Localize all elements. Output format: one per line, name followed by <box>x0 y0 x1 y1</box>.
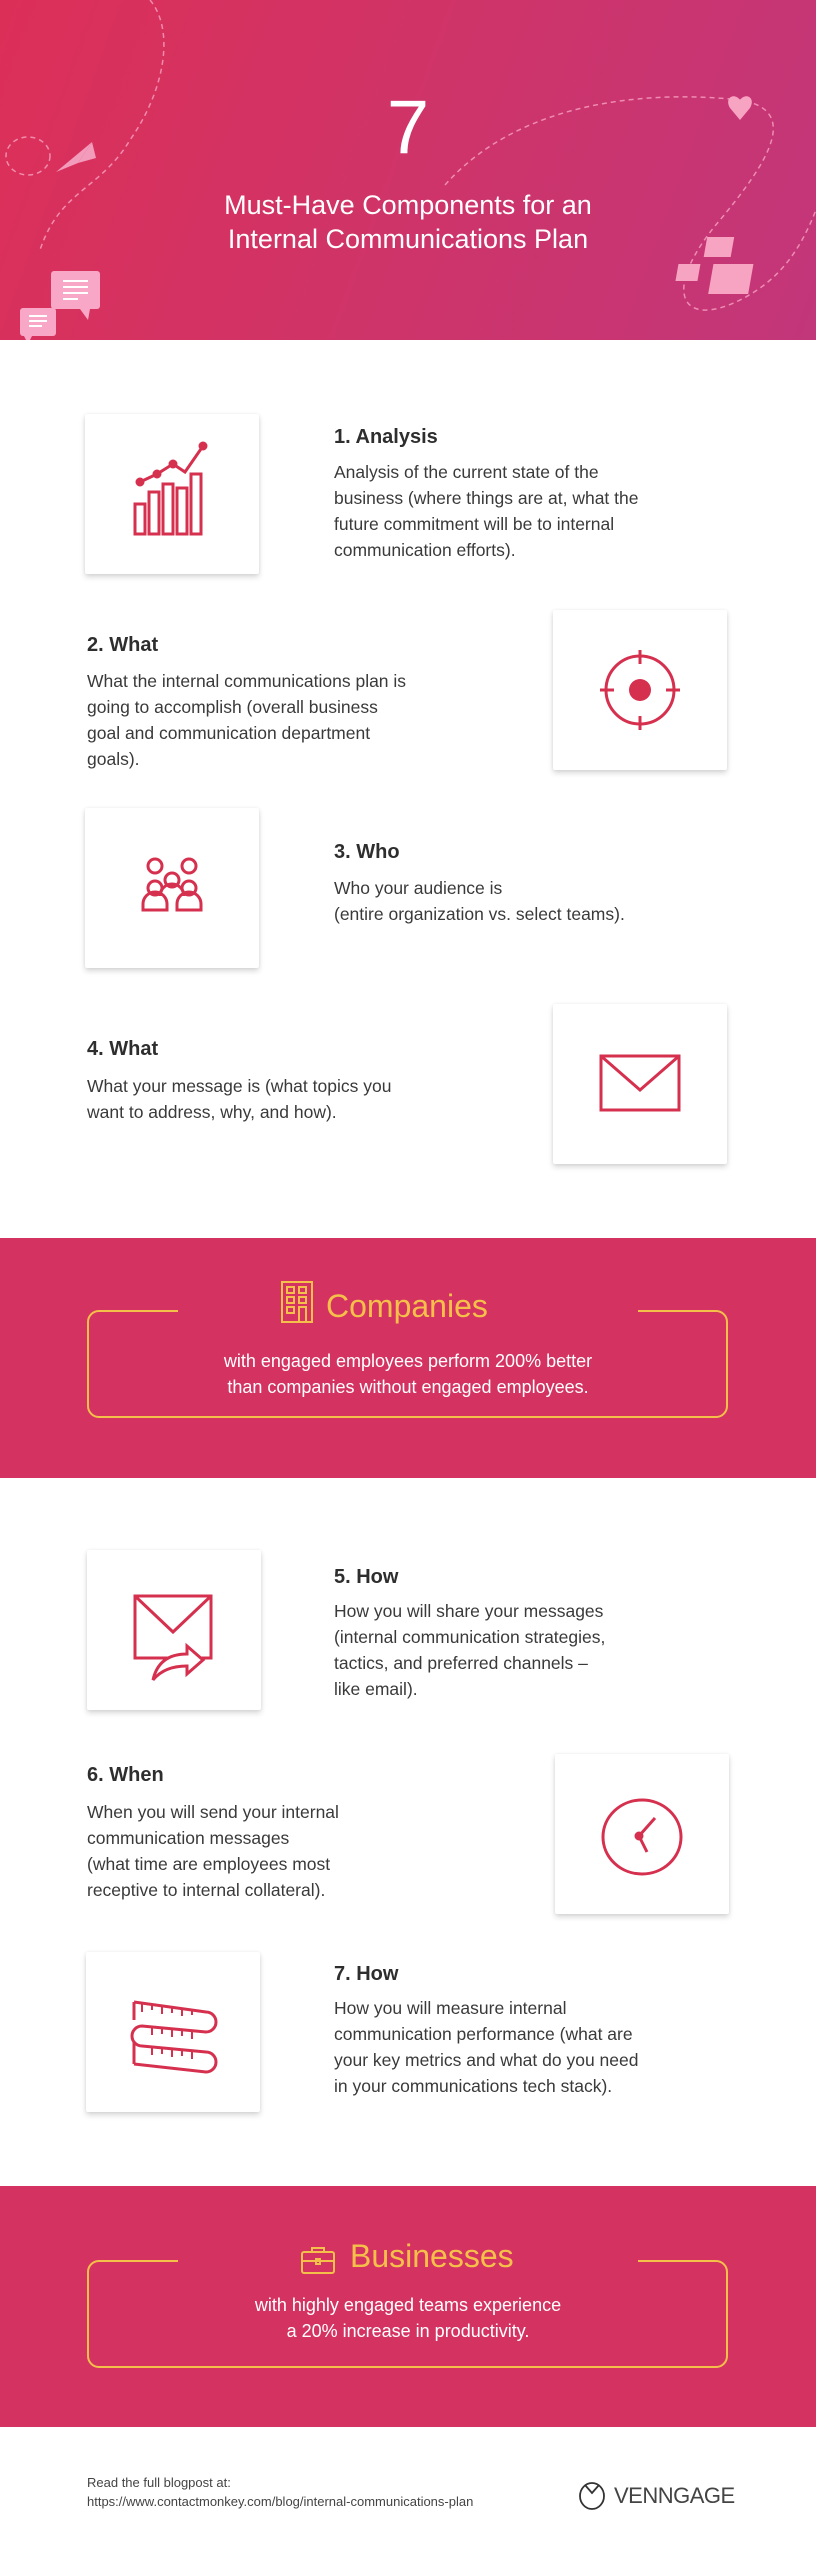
item 6 text: receptive to internal collateral). <box>87 1880 325 1900</box>
item 7 heading: 7. How <box>334 1963 398 1985</box>
stat band: companies <box>0 1238 816 1478</box>
item 2 text: goals). <box>87 749 140 769</box>
title: Internal Communications Plan <box>228 224 588 254</box>
item 3 text: Who your audience is <box>334 878 502 898</box>
icon: building <box>281 1281 313 1323</box>
title: Must-Have Components for an <box>224 190 592 220</box>
item 3 text: (entire organization vs. select teams). <box>334 904 625 924</box>
stat text: with highly engaged teams experience <box>255 2295 561 2315</box>
item 3 text <box>334 878 625 924</box>
icon: heart <box>728 96 752 120</box>
item 5 heading: 5. How <box>334 1566 398 1588</box>
item 1 text: business (where things are at, what the <box>334 488 638 508</box>
footer logo: venngage: VENNGAGE <box>614 2483 735 2508</box>
item 6 card: clock icon <box>555 1754 729 1914</box>
item 2 text <box>87 671 406 769</box>
item 6 heading: 6. When <box>87 1764 164 1786</box>
callout box <box>87 2260 728 2368</box>
item 6 text <box>87 1802 339 1900</box>
item 2 card: target icon <box>553 610 727 770</box>
item 7 text <box>334 1998 638 2096</box>
stat text: a 20% increase in productivity. <box>287 2321 529 2341</box>
item 5 text: tactics, and preferred channels – <box>334 1653 588 1673</box>
item 6 text: When you will send your internal <box>87 1802 339 1822</box>
footer source text <box>87 2475 473 2509</box>
item 1 heading: 1. Analysis <box>334 426 438 448</box>
item 4 heading: 4. What <box>87 1038 158 1060</box>
item 5 card: send email icon <box>87 1550 261 1710</box>
item 1 text: Analysis of the current state of the <box>334 462 599 482</box>
item 5 text: How you will share your messages <box>334 1601 603 1621</box>
item 1 text: future commitment will be to internal <box>334 514 614 534</box>
icon: briefcase <box>301 2247 335 2274</box>
stat band: businesses <box>0 2186 816 2427</box>
header banner <box>0 0 816 340</box>
stat text: than companies without engaged employees. <box>227 1377 589 1397</box>
callout box <box>87 1310 728 1418</box>
item 4 card: envelope icon <box>553 1004 727 1164</box>
stat heading: Businesses <box>350 2238 514 2274</box>
item 1 text: communication efforts). <box>334 540 516 560</box>
item 2 text: goal and communication department <box>87 723 370 743</box>
stat text <box>254 2295 561 2341</box>
item 2 heading: 2. What <box>87 634 158 656</box>
item 1 card: analysis icon <box>85 414 259 574</box>
stat text: with engaged employees perform 200% better <box>224 1351 592 1371</box>
item 7 text: in your communications tech stack). <box>334 2076 612 2096</box>
stat text <box>224 1351 592 1397</box>
item 2 text: What the internal communications plan is <box>87 671 406 691</box>
icon: envelopes <box>675 237 753 294</box>
title <box>224 190 592 254</box>
footer logo: venngage <box>579 2482 735 2510</box>
stat heading: Companies <box>326 1288 488 1324</box>
item 7 text: your key metrics and what do you need <box>334 2050 638 2070</box>
icon: paper plane <box>56 142 96 172</box>
item 7 text: communication performance (what are <box>334 2024 633 2044</box>
icon: chat bubbles <box>20 271 100 344</box>
item 4 text: What your message is (what topics you <box>87 1076 391 1096</box>
item 3 card: people icon <box>85 808 259 968</box>
title number: 7 <box>387 85 429 170</box>
footer source text: https://www.contactmonkey.com/blog/internal-communications-plan <box>87 2494 473 2509</box>
item 3 heading: 3. Who <box>334 841 400 863</box>
item 5 text: (internal communication strategies, <box>334 1627 605 1647</box>
item 2 text: going to accomplish (overall business <box>87 697 378 717</box>
item 7 text: How you will measure internal <box>334 1998 566 2018</box>
item 6 text: (what time are employees most <box>87 1854 330 1874</box>
item 7 card: measuring tape icon <box>86 1952 260 2112</box>
item 4 text <box>87 1076 391 1122</box>
footer source text: Read the full blogpost at: <box>87 2475 231 2490</box>
item 4 text: want to address, why, and how). <box>87 1102 337 1122</box>
item 5 text <box>334 1601 605 1699</box>
item 5 text: like email). <box>334 1679 418 1699</box>
item 1 text <box>334 462 638 560</box>
item 6 text: communication messages <box>87 1828 289 1848</box>
